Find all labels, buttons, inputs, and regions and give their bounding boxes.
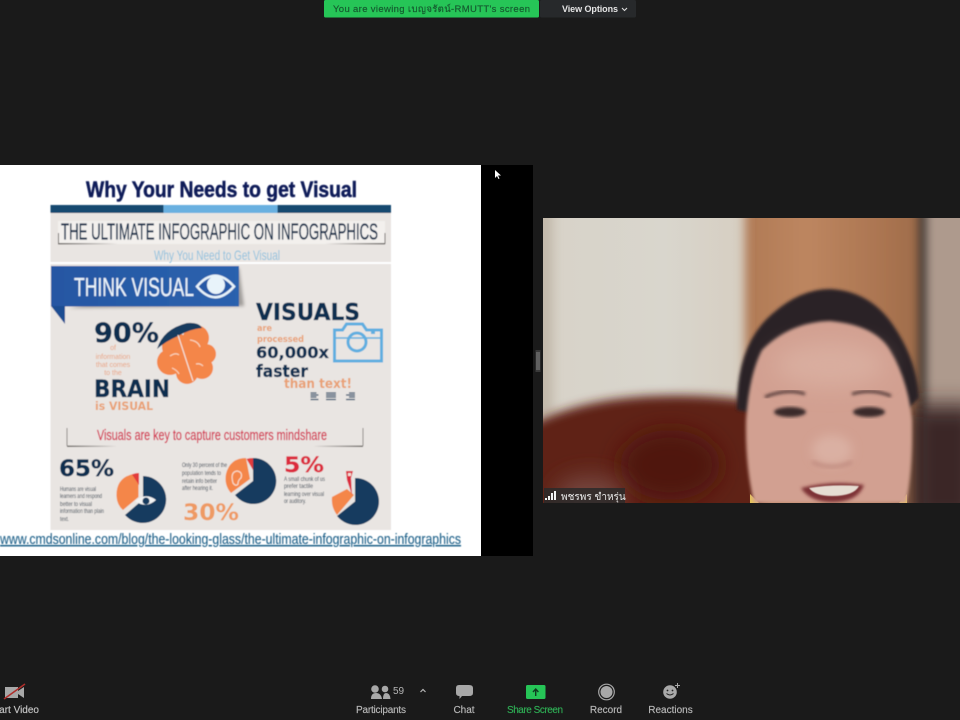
webcam video	[543, 218, 960, 503]
top banner: viewing screen: You are viewing เบญจรัตน์-RMUTT's screen	[333, 3, 530, 15]
icon: brain	[157, 323, 216, 384]
top banner: viewing screen	[324, 0, 539, 18]
stat: 5 percent: A small chunk of us	[284, 477, 325, 483]
toolbar: chat: Chat	[453, 705, 475, 716]
mouth	[801, 483, 864, 502]
stat: visuals 60,000x faster: are	[257, 324, 272, 334]
stat: 65 percent: 65%	[59, 457, 114, 482]
toolbar: chat	[453, 685, 475, 716]
stat: 30 percent: after hearing it.	[182, 486, 213, 492]
stat: 90 percent brain	[94, 318, 170, 413]
black presentation margin	[481, 165, 533, 556]
stat: 30 percent	[182, 463, 239, 526]
stat: 5 percent	[284, 453, 325, 505]
stat: 90 percent brain: of	[110, 345, 116, 352]
stat: 65 percent: information than plain	[60, 509, 104, 515]
stat: 30 percent: 30%	[183, 501, 239, 526]
slide title: Why Your Needs to get Visual	[86, 177, 357, 202]
stat: visuals 60,000x faster	[256, 300, 360, 392]
think visual ribbon: THINK VISUAL	[74, 272, 194, 302]
slide background	[0, 165, 481, 556]
stat: 65 percent	[59, 457, 114, 523]
nose	[812, 435, 852, 465]
brows	[765, 391, 891, 397]
view options button: View Options	[562, 4, 618, 14]
pie chart: 65 percent	[116, 473, 166, 523]
stat: visuals 60,000x faster: faster	[256, 362, 309, 381]
hair	[737, 289, 919, 412]
stat: 65 percent: text.	[60, 517, 69, 523]
toolbar: record: Record	[590, 705, 622, 716]
infographic heading: THE ULTIMATE INFOGRAPHIC ON INFOGRAPHICS	[61, 218, 378, 244]
icon: eye	[197, 276, 234, 297]
toolbar: participants: Participants	[356, 705, 406, 716]
stat: 90 percent brain: BRAIN	[94, 375, 170, 403]
icon: camera	[334, 324, 382, 361]
webcam background	[543, 218, 960, 503]
stat: 5 percent: 5%	[284, 453, 324, 477]
stat: visuals 60,000x faster: than text!	[284, 377, 352, 392]
infographic subtitle: Why You Need to Get Visual	[154, 247, 280, 263]
infographic panel	[50, 205, 391, 530]
eyes	[774, 407, 806, 417]
stat: 90 percent brain: is VISUAL	[95, 399, 154, 413]
infographic heading	[58, 218, 386, 244]
source url: www.cmdsonline.com/blog/the-looking-glass/the-ultimate-infographic-on-infographics	[0, 532, 461, 548]
stat: visuals 60,000x faster: 60,000x	[256, 343, 330, 362]
stat: 5 percent: or auditory.	[284, 499, 306, 505]
stat: 65 percent: better to visual	[60, 502, 92, 508]
stat: 90 percent brain: information	[96, 354, 130, 361]
toolbar: reactions	[648, 683, 693, 716]
toolbar: participants	[356, 685, 406, 716]
icon: text lines	[310, 393, 355, 400]
think visual ribbon	[51, 266, 244, 324]
pie chart: 5 percent	[332, 471, 379, 525]
person	[737, 289, 919, 503]
pie chart: 30 percent	[226, 458, 276, 504]
stat: 90 percent brain: 90%	[94, 318, 159, 349]
stat: 90 percent brain: to the	[104, 370, 122, 377]
toolbar: share screen: Share Screen	[507, 705, 563, 716]
mindshare heading: Visuals are key to capture customers mindshare	[97, 428, 327, 444]
stat: 30 percent: Only 30 percent of the	[182, 463, 227, 469]
stat: 65 percent: learners and respond	[60, 494, 102, 500]
stat: visuals 60,000x faster: processed	[257, 335, 304, 345]
stat: 5 percent: prefer tactile	[284, 484, 314, 490]
toolbar: reactions: Reactions	[648, 705, 693, 716]
colour bar	[50, 205, 391, 213]
stat: visuals 60,000x faster: VISUALS	[256, 300, 360, 326]
stat: 65 percent: Humans are visual	[60, 487, 96, 493]
view options button	[540, 0, 636, 18]
stat: 5 percent: learning over visual	[284, 492, 324, 498]
toolbar: start video	[0, 684, 39, 716]
toolbar: participants: 59	[393, 686, 405, 697]
toolbar: caret	[420, 690, 426, 692]
participant name tag: พชรพร ขำหรุ่น	[561, 492, 626, 503]
icon: mouse cursor	[495, 170, 501, 179]
splitter handle	[536, 350, 540, 372]
toolbar: share screen	[507, 685, 563, 716]
stat: 90 percent brain: that comes	[96, 362, 131, 369]
stat: 30 percent: retain info better	[182, 479, 217, 485]
face	[746, 321, 912, 503]
collar	[750, 494, 907, 503]
stat: 30 percent: population tends to	[182, 471, 222, 477]
toolbar: record	[590, 684, 622, 716]
shared slide	[0, 177, 461, 548]
participant name tag	[544, 488, 626, 503]
